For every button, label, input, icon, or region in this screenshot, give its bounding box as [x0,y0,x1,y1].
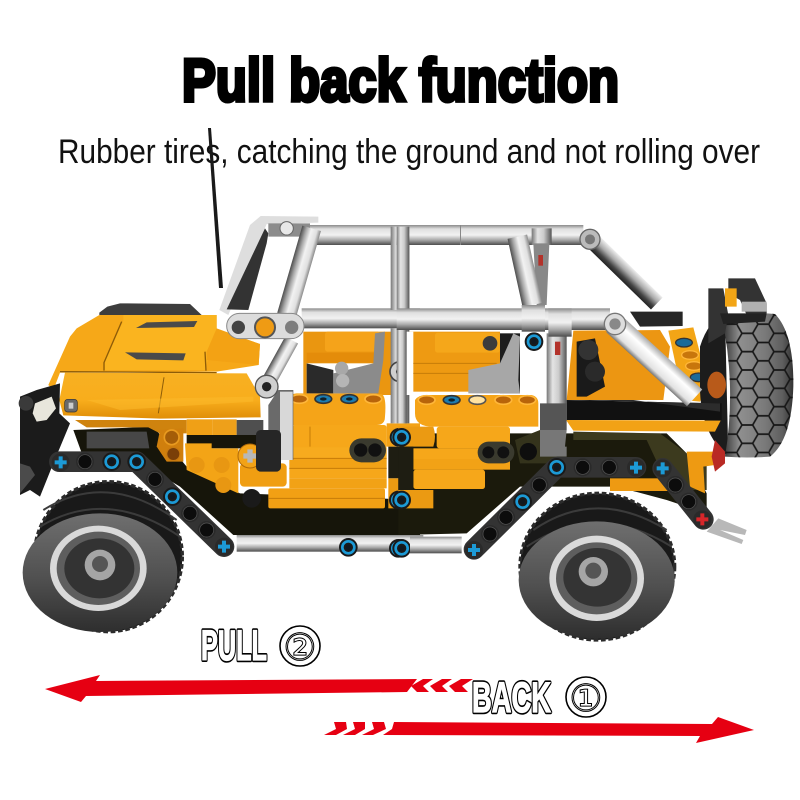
chassis dark right [398,433,707,535]
top roof rail [310,225,420,245]
seat bracket right [468,333,520,393]
center post right [525,332,567,457]
pull label fill: PULL [201,622,267,670]
gray link [227,313,304,339]
title: Pull back function [182,47,619,114]
antenna [208,128,223,288]
jeep right half [392,225,793,640]
rear upper tube [580,229,663,309]
circled 2: ② [283,626,317,669]
spare tire [700,288,793,457]
hood vent lower [125,352,186,360]
door lower right [392,427,510,558]
seat bracket gray [333,332,385,393]
interior panels right [398,332,520,395]
left tail tube [410,537,462,553]
lower a pillar tube [258,336,298,393]
center lower post right edge [397,328,407,423]
rear cabin orange [567,330,670,400]
front wheel [23,482,182,632]
door lower plates [240,423,420,508]
l beam [465,458,645,559]
spare bracket [720,278,767,324]
rear beam [654,459,711,528]
center upper post right edge [397,227,409,310]
top roof rail right [397,225,583,245]
pull label: PULL [201,622,267,670]
under fender orange [75,419,263,462]
windshield frame [219,216,318,315]
shock absorber [577,338,605,397]
black rear top panel [630,312,683,327]
center post lower [390,328,410,423]
chassis dark [73,427,420,535]
middle rail [302,308,420,328]
fender bolt [65,399,77,412]
exhaust [707,518,747,544]
front fender beam [52,432,233,556]
b pillar upper [508,235,549,307]
dark oval links [478,430,557,463]
hood vent upper [136,321,197,328]
circled 1: ① [569,677,603,720]
rear orange upright [668,327,709,402]
rear wheel [519,493,675,640]
door top beam [291,393,385,425]
lego block [185,443,238,493]
arrow: pull left [45,675,473,702]
hood scoop [99,303,202,315]
red connector [712,440,725,472]
arrow: back right [324,717,754,743]
middle rail right [397,305,610,337]
door top beam right [415,395,538,427]
lower sill tube [237,535,423,558]
jeep left half [19,216,423,632]
back label fill: BACK [472,674,551,722]
c pillar tube [604,313,702,406]
hood [48,315,260,390]
rear body rail [566,400,722,493]
interior orange panels [303,332,420,395]
dark oval beam [349,438,386,462]
back label: BACK [472,674,551,722]
center post upper [391,227,409,310]
side connectors [389,428,408,509]
front fender [59,373,261,419]
a pillar tube [277,226,321,318]
door hinge [255,375,293,472]
front bumper [19,383,70,497]
orange connector [238,444,262,468]
